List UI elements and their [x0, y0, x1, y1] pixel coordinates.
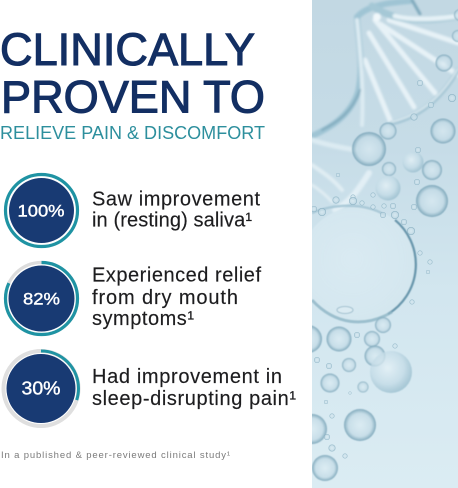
photo: DNA helix and water bubbles	[312, 0, 458, 488]
stat 2: 82%: 82%	[23, 290, 60, 308]
stat 3 text: sleep-disrupting pain¹	[92, 388, 296, 410]
stat 1 text: Saw improvement	[92, 188, 260, 210]
lower helix strands	[335, 173, 369, 210]
stat 1 text	[92, 188, 260, 232]
helix rungs	[365, 20, 458, 120]
footnote: In a published & peer-reviewed clinical study¹	[1, 450, 230, 461]
stat 3 text	[92, 366, 296, 410]
stat 3: 30%	[4, 351, 78, 426]
stat 2 text: from dry mouth	[92, 287, 238, 309]
stat 1: 100%	[6, 174, 78, 246]
title: PROVEN TO	[1, 72, 265, 122]
stat 1: 100%: 100%	[18, 202, 64, 220]
icon: DNA helix	[312, 0, 458, 210]
stat 3 text: Had improvement in	[92, 366, 282, 388]
title: CLINICALLY	[0, 24, 255, 75]
title	[0, 24, 265, 122]
stat 2: 82%	[6, 262, 78, 334]
stat 3: 30%: 30%	[22, 378, 60, 398]
subtitle: RELIEVE PAIN & DISCOMFORT	[0, 123, 265, 143]
stat 2 text: Experienced relief	[92, 264, 261, 286]
stat 2 text	[92, 264, 261, 330]
bubbles: small	[311, 80, 456, 458]
bubbles: large and medium	[312, 9, 458, 482]
bubble: huge	[300, 206, 416, 323]
stat 1 text: in (resting) saliva¹	[92, 210, 252, 232]
stat 2 text: symptoms¹	[92, 308, 194, 330]
